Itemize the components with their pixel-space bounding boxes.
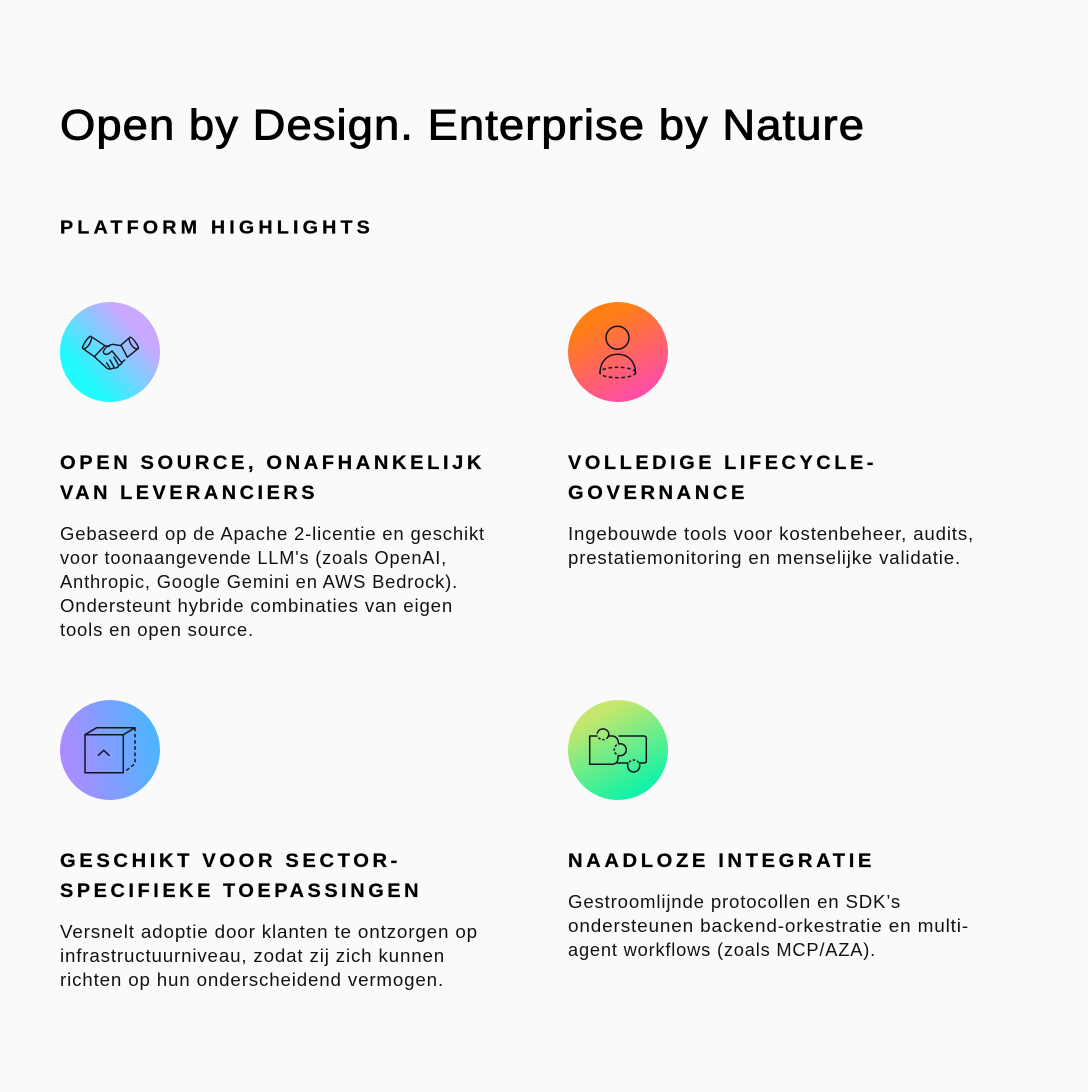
- card text: Ingebouwde tools voor kostenbeheer, audits,: [568, 524, 974, 544]
- card text: agent workflows (zoals MCP/AZA).: [568, 940, 876, 960]
- card text: Anthropic, Google Gemini en AWS Bedrock).: [60, 572, 458, 592]
- icon: cube: [60, 700, 160, 800]
- card text: prestatiemonitoring en menselijke validatie.: [568, 548, 961, 568]
- card heading: [60, 851, 422, 902]
- card heading: GOVERNANCE: [568, 483, 748, 504]
- card text: tools en open source.: [60, 620, 254, 640]
- card heading: SPECIFIEKE TOEPASSINGEN: [60, 881, 422, 902]
- panel: seamless integration: [568, 700, 969, 960]
- panel: lifecycle governance: [568, 302, 974, 568]
- card text: voor toonaangevende LLM's (zoals OpenAI,: [60, 548, 447, 568]
- title: Open by Design. Enterprise by Nature: [60, 102, 865, 150]
- card text: [568, 892, 969, 960]
- card text: Ondersteunt hybride combinaties van eigen: [60, 596, 453, 616]
- card text: Gebaseerd op de Apache 2-licentie en geschikt: [60, 524, 485, 544]
- icon: person: [568, 302, 668, 402]
- icon: puzzle pieces: [568, 700, 668, 800]
- section heading: PLATFORM HIGHLIGHTS: [60, 218, 374, 238]
- card text: [60, 922, 478, 990]
- icon: handshake: [60, 302, 160, 402]
- card text: [568, 524, 974, 568]
- card heading: VAN LEVERANCIERS: [60, 483, 318, 504]
- card text: Gestroomlijnde protocollen en SDK’s: [568, 892, 901, 912]
- card text: infrastructuurniveau, zodat zij zich kunnen: [60, 946, 445, 966]
- card heading: [60, 453, 485, 504]
- card text: richten op hun onderscheidend vermogen.: [60, 970, 444, 990]
- card text: ondersteunen backend-orkestratie en multi-: [568, 916, 969, 936]
- card heading: OPEN SOURCE, ONAFHANKELIJK: [60, 453, 485, 474]
- card heading: VOLLEDIGE LIFECYCLE-: [568, 453, 877, 474]
- card heading: GESCHIKT VOOR SECTOR-: [60, 851, 401, 872]
- card text: [60, 524, 485, 640]
- card text: Versnelt adoptie door klanten te ontzorgen op: [60, 922, 478, 942]
- panel: open source: [60, 302, 485, 640]
- card heading: NAADLOZE INTEGRATIE: [568, 851, 875, 872]
- card heading: [568, 453, 877, 504]
- panel: sector applications: [60, 700, 478, 990]
